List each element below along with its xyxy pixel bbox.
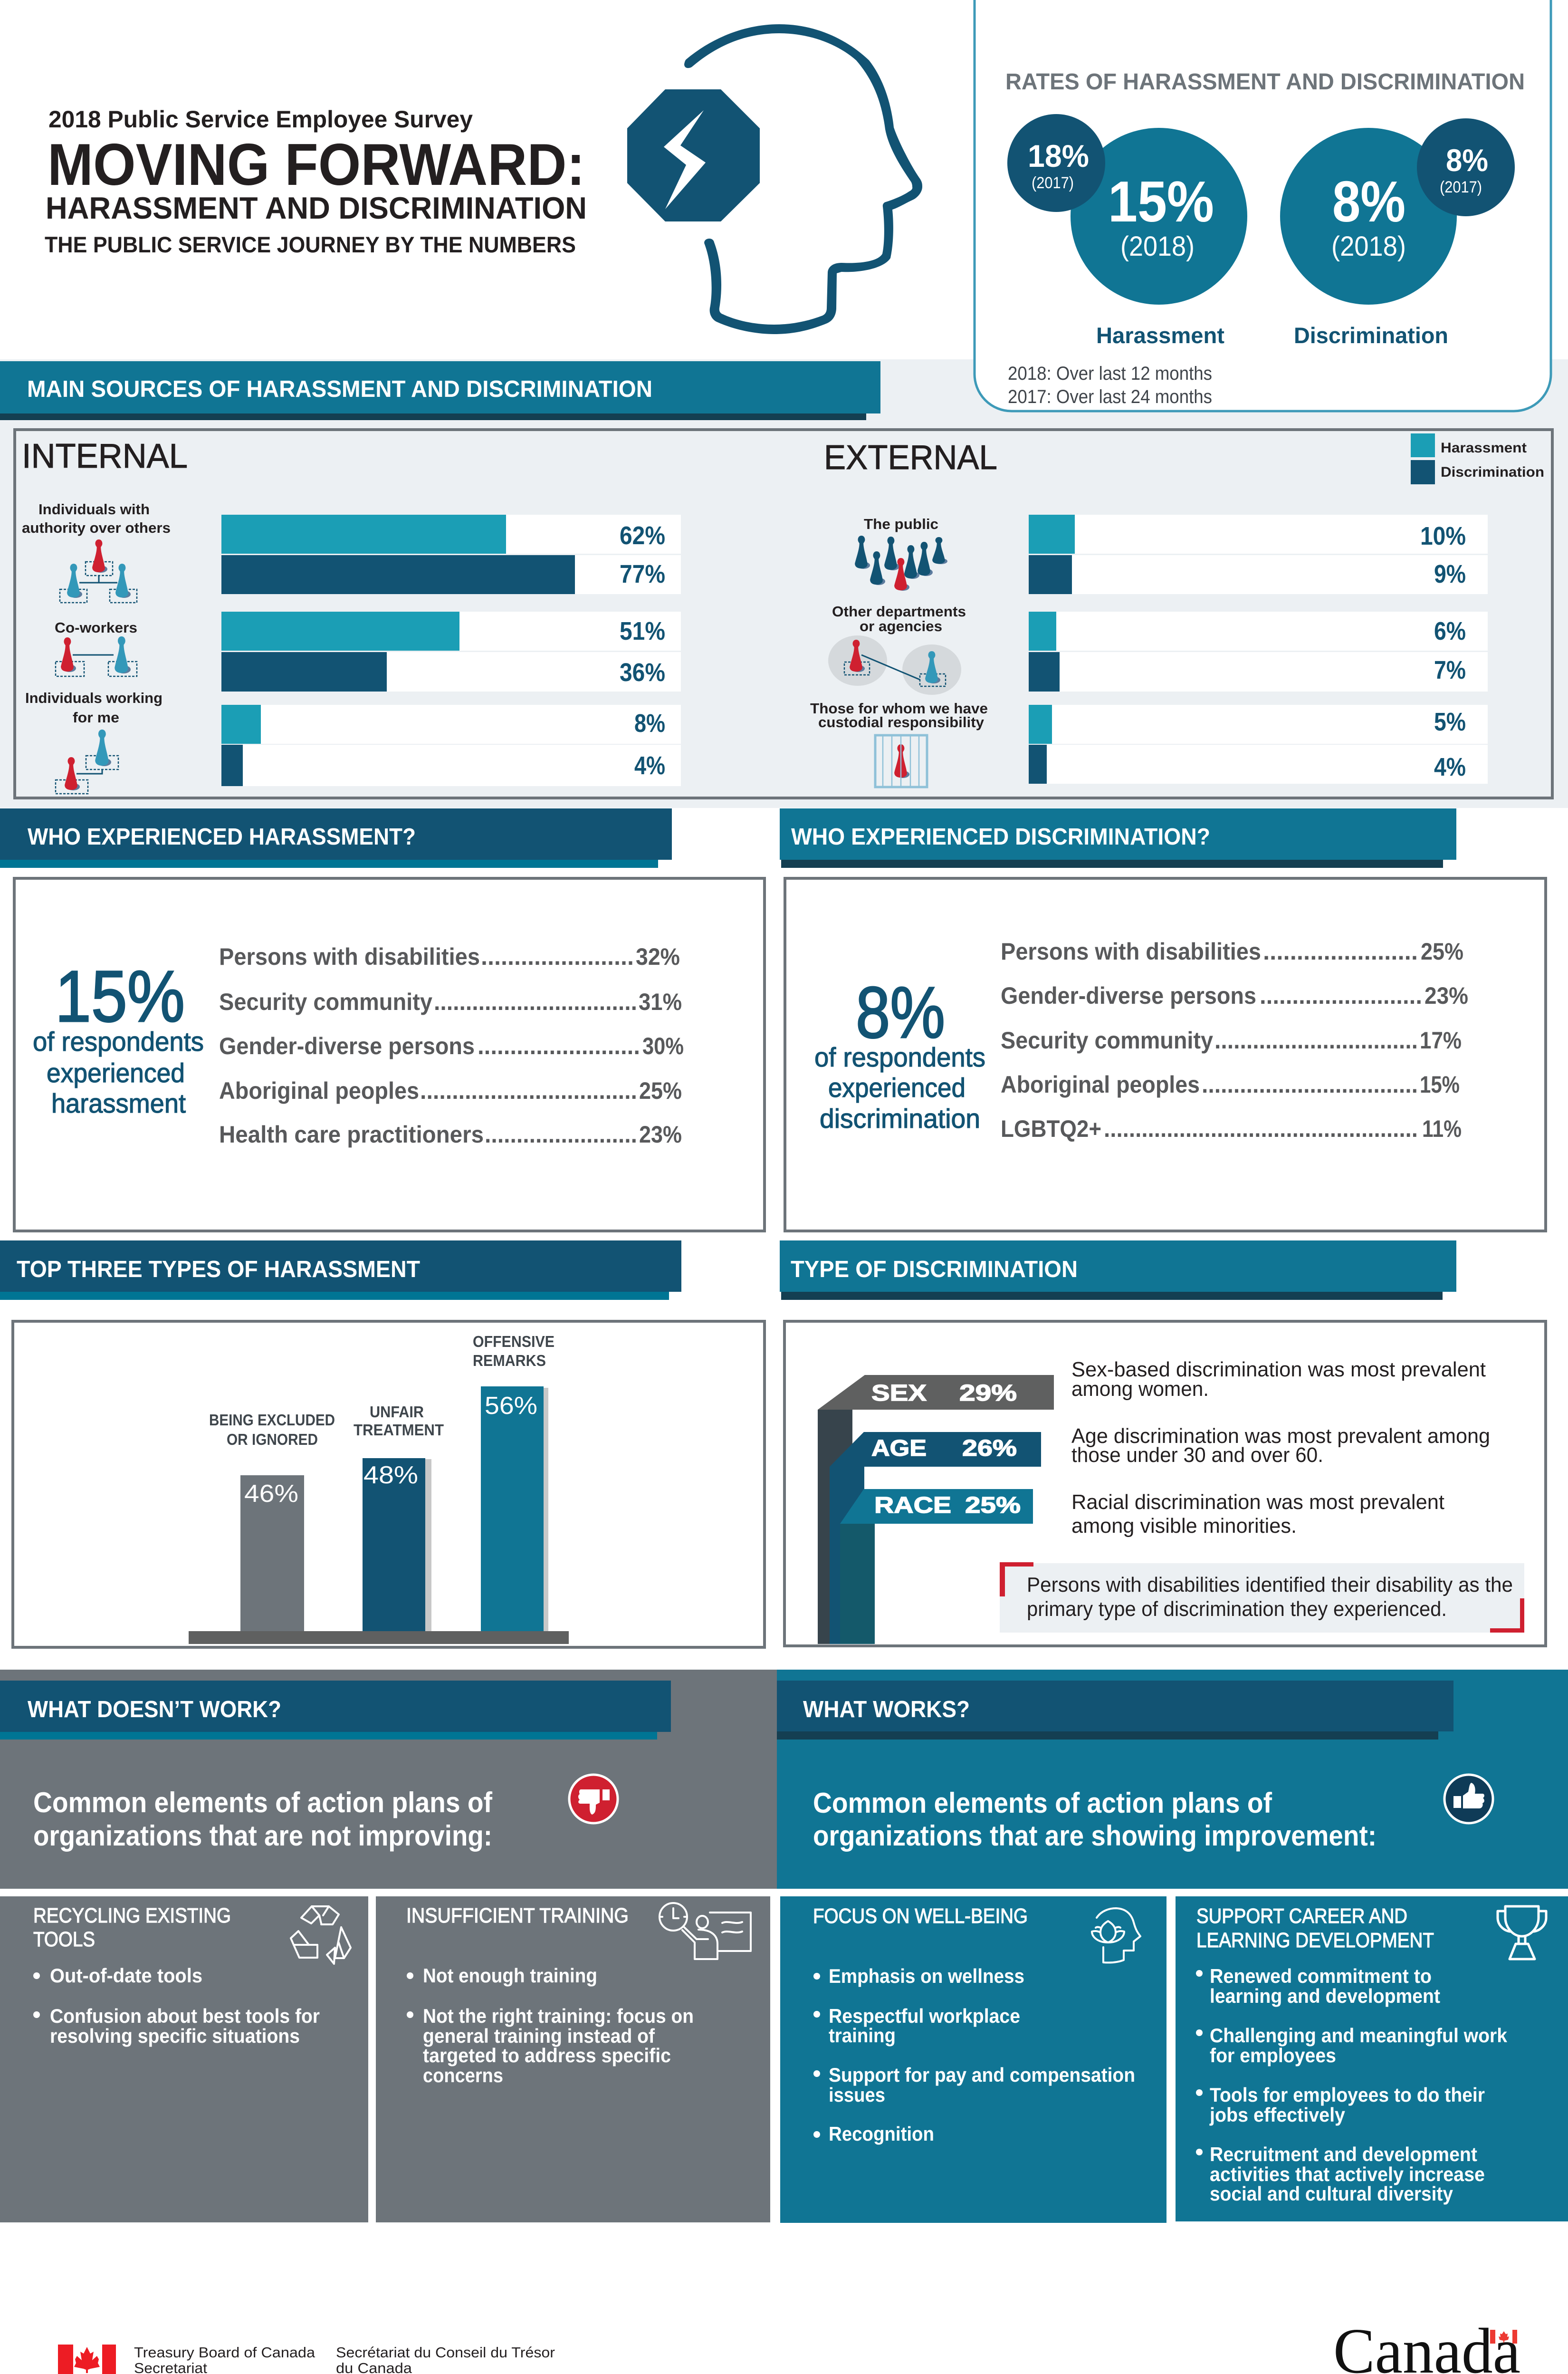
ranked list: 25% <box>639 1077 682 1104</box>
source: custodial responsibility: Those for whom we have <box>810 700 988 717</box>
heading: external: EXTERNAL <box>824 439 997 477</box>
circle: harassment 2017: 18% <box>1028 138 1089 173</box>
card: recycling existing tools <box>0 1896 368 2222</box>
ranked list: 25% <box>1421 938 1463 965</box>
big number 8%: of respondents <box>814 1042 985 1073</box>
ranked list: Persons with disabilities <box>219 943 480 970</box>
heading banner: who experienced harassment <box>0 808 672 868</box>
ranked list: ................................ <box>434 989 637 1015</box>
lead text <box>33 1787 493 1852</box>
bullet list: issues <box>829 2084 885 2106</box>
source: individuals working for me: for me <box>73 709 119 726</box>
bullet list: jobs effectively <box>1209 2104 1346 2126</box>
card: support career and learning development <box>1176 1896 1568 2221</box>
big number 8%: experienced <box>828 1073 966 1103</box>
ranked list: ........................ <box>485 1121 637 1148</box>
ranked list: ....................... <box>1263 938 1418 965</box>
panel: internal and external sources <box>15 430 1552 798</box>
bar chart: internal: 51% <box>620 617 665 645</box>
bar chart: external: 7% <box>1434 656 1466 684</box>
ranked list: Security community <box>219 989 432 1015</box>
heading banner: main sources: MAIN SOURCES OF HARASSMENT AND DISCRIMINATION <box>27 376 652 402</box>
circle: harassment 2017: (2017) <box>1032 174 1074 192</box>
circle: discrimination 2018: 8% <box>1332 169 1405 234</box>
bullet list: Confusion about best tools for <box>50 2005 320 2027</box>
label: harassment: Harassment <box>1096 323 1224 348</box>
heading banner: WHAT DOESN’T WORK? <box>28 1697 281 1722</box>
ranked list <box>1001 938 1468 1142</box>
main title: MOVING FORWARD: <box>48 132 585 198</box>
tagline: THE PUBLIC SERVICE JOURNEY BY THE NUMBERS <box>45 232 576 257</box>
bar chart: internal: 36% <box>620 658 665 687</box>
bar chart: internal: 4% <box>634 751 665 780</box>
card: recycling existing tools: TOOLS <box>33 1928 95 1951</box>
big number 8% <box>814 972 985 1134</box>
big number 15%: 15% <box>55 956 185 1037</box>
bullet list: Recruitment and development <box>1210 2143 1477 2165</box>
panel: rates of harassment and discrimination <box>975 0 1551 411</box>
heading banner: WHAT WORKS? <box>803 1697 970 1722</box>
note: time periods <box>1008 363 1212 407</box>
lead text: Common elements of action plans of <box>33 1787 493 1818</box>
heading banner: who experienced discrimination: WHO EXPERIENCED DISCRIMINATION? <box>791 824 1210 850</box>
heading banner <box>777 1681 1453 1740</box>
signpost: sex: SEX <box>871 1381 927 1406</box>
ranked list: 17% <box>1420 1027 1462 1054</box>
footer: Treasury Board signature <box>58 2344 555 2374</box>
icon: thumbs down <box>569 1775 618 1823</box>
bullet list <box>1196 1965 1508 2205</box>
footer: Treasury Board signature: Treasury Board of Canada <box>134 2344 316 2361</box>
ranked list: 11% <box>1422 1115 1462 1142</box>
card: support career and learning development: LEARNING DEVELOPMENT <box>1196 1929 1434 1952</box>
card: support career and learning development: SUPPORT CAREER AND <box>1196 1904 1407 1928</box>
card: insufficient training: INSUFFICIENT TRAINING <box>406 1904 629 1927</box>
signpost: age: 26% <box>962 1436 1017 1461</box>
callout: Persons with disabilities identified their disability as the <box>1027 1573 1513 1596</box>
panel: who experienced discrimination <box>785 878 1546 1231</box>
circle: discrimination 2018 <box>1280 128 1457 305</box>
big number 8%: 8% <box>856 972 945 1053</box>
bar chart: internal: 77% <box>620 560 665 588</box>
source: individuals working for me: Individuals working <box>25 690 163 706</box>
bullet list: targeted to address specific <box>423 2044 671 2066</box>
descriptions: Sex-based discrimination was most prevalent <box>1071 1358 1486 1381</box>
card: recycling existing tools: RECYCLING EXISTING <box>33 1904 231 1927</box>
ranked list <box>219 943 684 1148</box>
ranked list: Gender-diverse persons <box>219 1033 475 1059</box>
lead text: organizations that are not improving: <box>33 1820 492 1852</box>
icon: Canadian flag <box>58 2345 116 2374</box>
ranked list: ......................... <box>1260 982 1422 1009</box>
card: focus on well-being <box>780 1896 1166 2223</box>
bullet list: Support for pay and compensation <box>829 2064 1135 2086</box>
signpost: race <box>840 1489 1033 1644</box>
circle: discrimination 2017: 8% <box>1446 143 1488 178</box>
icon: octagon <box>627 89 760 221</box>
icon: trainer with clock and board <box>660 1903 751 1959</box>
bullet list: Not the right training: focus on <box>423 2005 694 2027</box>
bullet list: Not enough training <box>423 1964 597 1987</box>
bullet list <box>33 1964 320 2047</box>
icon: head with lotus <box>1092 1908 1140 1962</box>
big number 15%: of respondents <box>33 1027 204 1057</box>
bar chart <box>189 1386 569 1644</box>
big number 15%: experienced <box>47 1058 185 1088</box>
bar labels: BEING EXCLUDED <box>209 1411 335 1429</box>
heading: RATES OF HARASSMENT AND DISCRIMINATION <box>1005 69 1525 95</box>
title block <box>45 106 587 257</box>
bar chart: external <box>1029 515 1488 784</box>
circle: harassment 2018: 15% <box>1108 169 1214 234</box>
source: co-workers: Co-workers <box>55 619 137 636</box>
circle: discrimination 2018: (2018) <box>1331 231 1406 262</box>
lead text: Common elements of action plans of <box>813 1787 1272 1819</box>
bullet list: Recognition <box>829 2123 934 2145</box>
ranked list: 32% <box>636 943 680 970</box>
heading banner: top three types of harassment: TOP THREE TYPES OF HARASSMENT <box>17 1257 420 1282</box>
heading banner: type of discrimination <box>780 1240 1456 1300</box>
card: insufficient training <box>376 1896 770 2222</box>
lead text <box>813 1787 1377 1852</box>
descriptions: Age discrimination was most prevalent among <box>1071 1424 1490 1448</box>
lead text: organizations that are showing improvement: <box>813 1820 1377 1852</box>
bar chart: internal: 62% <box>620 521 665 550</box>
bullet list <box>407 1964 694 2086</box>
callout <box>1000 1562 1524 1633</box>
ranked list: Gender-diverse persons <box>1001 982 1256 1009</box>
source: other departments or agencies: or agencies <box>860 618 942 634</box>
heading banner: who experienced harassment: WHO EXPERIENCED HARASSMENT? <box>28 824 416 850</box>
footer: Treasury Board signature: Secrétariat du Conseil du Trésor <box>336 2344 555 2361</box>
ranked list: ....................... <box>481 943 634 970</box>
ranked list: ................................ <box>1214 1027 1418 1054</box>
legend: Discrimination <box>1441 464 1544 480</box>
label: discrimination: Discrimination <box>1294 323 1448 348</box>
icon: lightning bolt <box>664 110 706 209</box>
bullet list: for employees <box>1210 2044 1336 2066</box>
bullet list: training <box>829 2024 896 2047</box>
bar chart: internal <box>221 515 681 786</box>
ranked list: 23% <box>639 1121 682 1148</box>
heading banner: type of discrimination: TYPE OF DISCRIMINATION <box>791 1257 1078 1282</box>
heading: internal: INTERNAL <box>22 437 188 475</box>
survey name: 2018 Public Service Employee Survey <box>48 106 473 133</box>
bar chart: external: 9% <box>1434 560 1466 588</box>
descriptions: Racial discrimination was most prevalent <box>1071 1490 1444 1514</box>
source: other departments or agencies <box>828 603 966 695</box>
circle: discrimination 2017 <box>1417 118 1515 216</box>
circle: discrimination 2017: (2017) <box>1440 178 1482 196</box>
ranked list: Aboriginal peoples <box>219 1077 419 1104</box>
descriptions: among women. <box>1071 1377 1209 1401</box>
bar chart: 48% <box>363 1461 418 1489</box>
bar chart: external: 6% <box>1434 617 1466 645</box>
descriptions: those under 30 and over 60. <box>1071 1443 1323 1467</box>
heading banner <box>0 1681 671 1740</box>
legend: Harassment <box>1441 440 1527 456</box>
source: individuals with authority: authority over others <box>22 519 171 536</box>
icon: small flag <box>1490 2330 1517 2344</box>
ranked list: Health care practitioners <box>219 1121 484 1148</box>
icon: thumbs up <box>1444 1775 1493 1823</box>
signpost: race: 25% <box>965 1493 1021 1518</box>
ranked list: Security community <box>1001 1027 1213 1054</box>
signpost: sex <box>818 1375 1054 1644</box>
signpost: sex: 29% <box>959 1381 1017 1406</box>
descriptions: among visible minorities. <box>1071 1514 1297 1538</box>
bar chart: external: 5% <box>1434 708 1466 736</box>
source: other departments or agencies: Other departments <box>832 603 966 620</box>
source: custodial responsibility: custodial responsibility <box>818 714 985 730</box>
bar labels: OFFENSIVE <box>473 1333 555 1350</box>
panel: type of discrimination <box>784 1321 1546 1646</box>
bullet list: social and cultural diversity <box>1210 2182 1453 2205</box>
bullet list: concerns <box>423 2064 503 2086</box>
icon: trophy <box>1498 1906 1546 1959</box>
source: the public: The public <box>864 516 938 532</box>
source: individuals with authority: Individuals with <box>38 501 150 518</box>
panel: what doesn't work <box>0 1670 777 1889</box>
signpost: race: RACE <box>874 1493 951 1518</box>
ranked list: LGBTQ2+ <box>1001 1115 1101 1142</box>
circle: harassment 2018 <box>1071 128 1247 305</box>
big number 15% <box>33 956 204 1119</box>
icon: recycle <box>291 1906 351 1964</box>
icon: head with stop sign and lightning <box>627 24 922 334</box>
heading banner: main sources <box>0 361 880 420</box>
ranked list: .................................. <box>420 1077 637 1104</box>
note: time periods: 2017: Over last 24 months <box>1008 386 1212 407</box>
bullet list: Emphasis on wellness <box>829 1965 1024 1987</box>
ranked list: .................................. <box>1202 1071 1418 1098</box>
heading banner: who experienced discrimination <box>780 808 1456 868</box>
ranked list: .................................................. <box>1104 1115 1418 1142</box>
bullet list: Respectful workplace <box>829 2005 1020 2027</box>
bullet list: resolving specific situations <box>50 2025 300 2047</box>
descriptions <box>1071 1358 1490 1538</box>
circle: harassment 2018: (2018) <box>1120 231 1195 262</box>
bar labels: UNFAIR <box>370 1403 424 1421</box>
ranked list: Persons with disabilities <box>1001 938 1261 965</box>
source: the public <box>855 516 947 591</box>
signpost: age: AGE <box>871 1436 927 1461</box>
ranked list: 15% <box>1420 1071 1460 1098</box>
bullet list: Challenging and meaningful work <box>1210 2024 1508 2047</box>
ranked list: Aboriginal peoples <box>1001 1071 1200 1098</box>
card: focus on well-being: FOCUS ON WELL-BEING <box>813 1904 1028 1928</box>
panel: top three types of harassment <box>13 1321 765 1647</box>
bar chart: internal: 8% <box>634 709 665 738</box>
source: custodial responsibility <box>810 700 988 787</box>
ranked list: 23% <box>1425 982 1468 1009</box>
bar chart: external: 10% <box>1420 522 1466 550</box>
bullet list: learning and development <box>1210 1985 1440 2007</box>
bar labels <box>209 1333 555 1448</box>
bar labels: REMARKS <box>473 1352 546 1369</box>
bar chart: external: 4% <box>1434 753 1466 781</box>
bar chart: 56% <box>485 1392 537 1420</box>
note: time periods: 2018: Over last 12 months <box>1008 363 1212 384</box>
big number 8%: discrimination <box>820 1104 980 1134</box>
bullet list: general training instead of <box>423 2025 655 2047</box>
bar chart: 46% <box>244 1480 298 1508</box>
source: individuals working for me <box>25 690 163 794</box>
bullet list: Tools for employees to do their <box>1210 2084 1485 2106</box>
signpost: age <box>830 1432 1041 1644</box>
legend <box>1411 433 1544 484</box>
bullet list <box>813 1965 1135 2145</box>
ranked list: ......................... <box>478 1033 640 1059</box>
ranked list: 31% <box>639 989 682 1015</box>
panel: what works <box>777 1670 1568 1889</box>
ranked list: 30% <box>642 1033 684 1059</box>
source: individuals with authority <box>22 501 171 603</box>
subtitle: HARASSMENT AND DISCRIMINATION <box>46 191 587 225</box>
panel: who experienced harassment <box>14 878 765 1231</box>
callout: primary type of discrimination they experienced. <box>1027 1597 1447 1621</box>
bullet list: Renewed commitment to <box>1210 1965 1432 1987</box>
source: co-workers <box>55 619 137 676</box>
bar labels: TREATMENT <box>354 1421 444 1439</box>
circle: harassment 2017 <box>1007 114 1105 212</box>
bullet list: Out-of-date tools <box>50 1964 202 1987</box>
bar labels: OR IGNORED <box>227 1431 318 1448</box>
big number 15%: harassment <box>51 1088 186 1119</box>
bullet list: activities that actively increase <box>1210 2163 1485 2185</box>
heading banner: top three types of harassment <box>0 1240 681 1300</box>
